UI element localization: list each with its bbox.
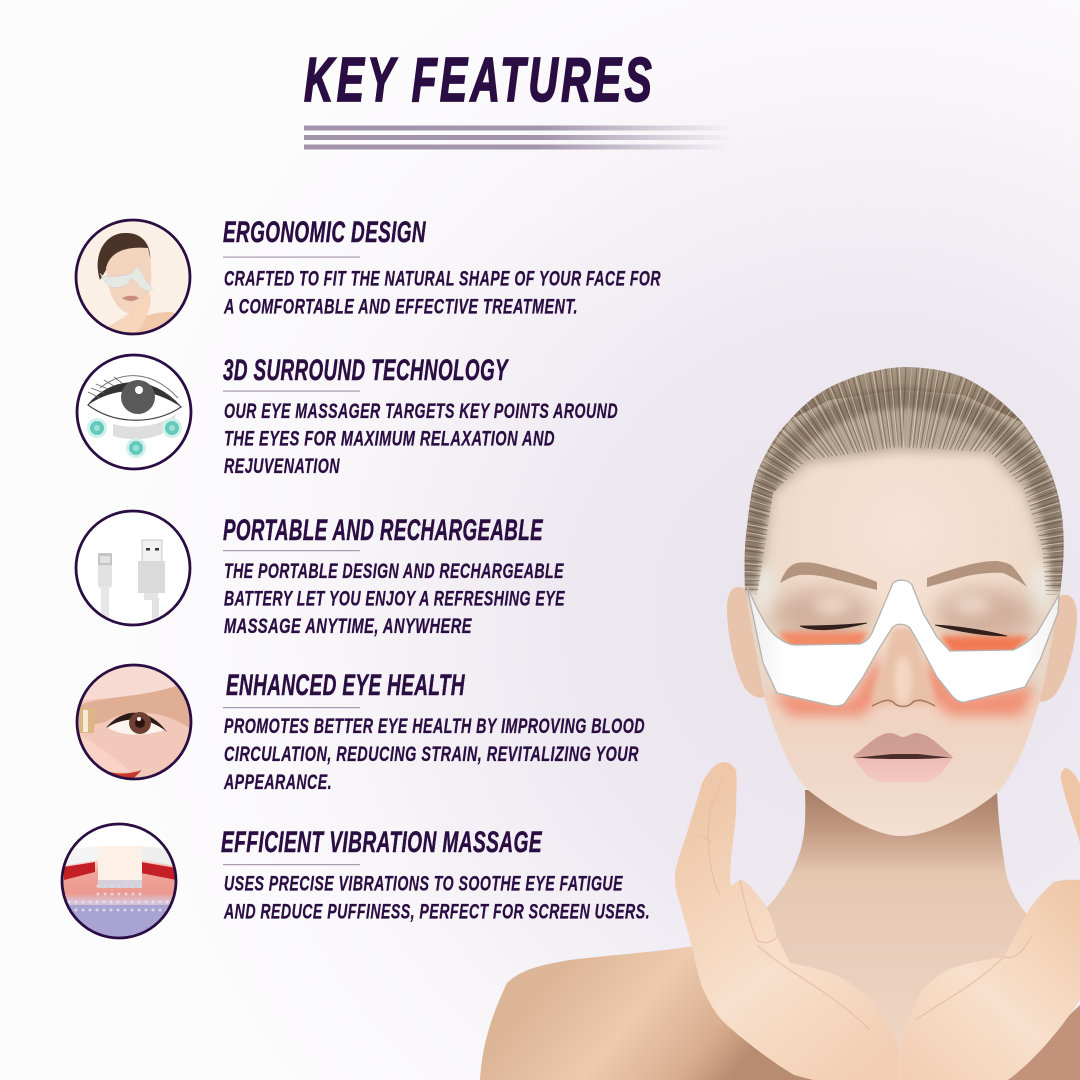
description: OUR EYE MASSAGER TARGETS KEY POINTS AROUND (224, 399, 618, 423)
left ear (727, 587, 768, 698)
woman wearing LED eye massager (480, 360, 1080, 1080)
neck and chest (740, 790, 1040, 1070)
orange light right (940, 636, 1030, 654)
description: APPEARANCE. (223, 770, 332, 794)
left hand (675, 762, 899, 1080)
description: CRAFTED TO FIT THE NATURAL SHAPE OF YOUR FACE FOR (224, 266, 661, 290)
title: KEY FEATURES (304, 46, 655, 115)
heading: ERGONOMIC DESIGN (223, 216, 426, 249)
eyebrow right (927, 561, 1027, 587)
icon: close-up of eye (75, 663, 195, 781)
lips (853, 733, 953, 782)
closed eye lash right (935, 625, 1007, 636)
right hand (899, 768, 1080, 1080)
description: AND REDUCE PUFFINESS, PERFECT FOR SCREEN USERS. (223, 900, 650, 924)
closed eye lash left (800, 623, 867, 630)
divider line (223, 390, 360, 392)
hair strands (748, 398, 1060, 595)
icon: eye with massage points (77, 355, 191, 469)
eyelid highlight right (954, 595, 990, 615)
orange light left (778, 632, 868, 648)
icon: USB charging cable (76, 511, 190, 634)
description (223, 714, 645, 794)
heading: PORTABLE AND RECHARGEABLE (223, 514, 543, 547)
feature: ergonomic design (74, 218, 661, 336)
heading: 3D SURROUND TECHNOLOGY (223, 354, 509, 387)
eyebrow left (780, 562, 877, 590)
upper face skin (740, 385, 1070, 710)
description (224, 559, 565, 638)
description: USES PRECISE VIBRATIONS TO SOOTHE EYE FATIGUE (224, 872, 623, 896)
eyelid highlight left (814, 595, 850, 615)
description: A COMFORTABLE AND EFFECTIVE TREATMENT. (223, 294, 578, 318)
nose highlight (894, 656, 912, 704)
soft hairline (740, 380, 1070, 605)
description: CIRCULATION, REDUCING STRAIN, REVITALIZING YOUR (224, 742, 639, 766)
lower face skin (764, 697, 1040, 836)
pale temples (753, 564, 1052, 616)
face skin and features (740, 380, 1070, 840)
icon: skin layers cross-section (60, 824, 180, 942)
feature: portable and rechargeable (76, 511, 565, 638)
right ear (1035, 595, 1077, 702)
icon: woman wearing eye mask (74, 218, 192, 336)
red light glow left (772, 655, 884, 716)
white LED eye mask (747, 580, 1059, 706)
description: THE PORTABLE DESIGN AND RECHARGEABLE (224, 559, 564, 583)
nostrils (872, 700, 935, 706)
mouth line (853, 754, 953, 759)
right hand palm lines (915, 935, 1032, 1020)
description: MASSAGE ANYTIME, ANYWHERE (224, 614, 472, 638)
description: REJUVENATION (224, 454, 340, 478)
description: THE EYES FOR MAXIMUM RELAXATION AND (224, 426, 555, 450)
right shoulder (1000, 1005, 1080, 1080)
feature: 3D surround technology (77, 354, 618, 478)
left hand finger and palm lines (699, 780, 870, 1030)
feature: efficient vibration massage (60, 824, 650, 942)
divider line (223, 707, 360, 708)
heading: ENHANCED EYE HEALTH (226, 669, 465, 702)
eye socket shadow right (935, 589, 1035, 641)
nose (872, 628, 933, 708)
heading: EFFICIENT VIBRATION MASSAGE (221, 826, 542, 859)
hair base (744, 367, 1064, 594)
description: BATTERY LET YOU ENJOY A REFRESHING EYE (224, 586, 565, 610)
feature: enhanced eye health (75, 663, 645, 794)
description: PROMOTES BETTER EYE HEALTH BY IMPROVING BLOOD (224, 714, 645, 738)
description (223, 266, 661, 318)
divider line (223, 864, 360, 865)
red light glow right (924, 655, 1035, 716)
left shoulder (480, 945, 860, 1080)
title underline stripes (304, 126, 734, 150)
divider line (223, 550, 360, 551)
divider line (223, 256, 360, 258)
eye socket shadow left (772, 589, 872, 641)
description (224, 399, 618, 478)
description (223, 872, 650, 924)
